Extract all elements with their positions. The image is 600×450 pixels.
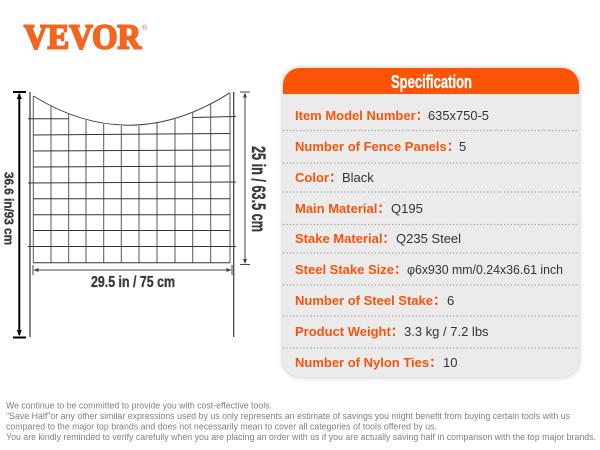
fence diagram	[2, 92, 268, 338]
row: product weight	[295, 324, 489, 339]
row: item model number: Item Model Number：	[295, 108, 429, 123]
row: stake material: Stake Material：	[295, 231, 395, 246]
footer disclaimer: compared to the major top brands and does not necessarily mean to cover all categories of tools offered by us.	[6, 422, 437, 432]
row: steel stake size	[295, 262, 563, 277]
height arrow 36.6 in: 36.6 in/93 cm	[2, 172, 16, 245]
row: number of nylon ties: 10	[443, 355, 457, 370]
row: steel stake size: Steel Stake Size：	[295, 262, 407, 277]
footer disclaimer: You are kindly reminded to verify carefully when you are placing an order with us if you are actually saving half in comparison with the top major brands.	[6, 432, 596, 442]
row: number of steel stake: Number of Steel Stake：	[295, 293, 446, 308]
footer disclaimer: We continue to be committed to provide you with cost-effective tools.	[6, 400, 272, 410]
width arrow 29.5 in	[33, 265, 232, 291]
footer disclaimer: "Save Half"or any other similar expressions used by us only represents an estimate of savings you might benefit from buying certain tools with us	[6, 411, 570, 421]
row: number of steel stake: 6	[447, 293, 454, 308]
row: product weight: 3.3 kg / 7.2 lbs	[404, 324, 489, 339]
row: number of fence panels: 5	[459, 139, 466, 154]
row: color: Black	[342, 170, 374, 185]
row: stake material	[295, 231, 461, 246]
specification panel	[282, 67, 580, 378]
row: product weight: Product Weight：	[295, 324, 404, 339]
panel header: Specification	[391, 72, 472, 92]
row: number of fence panels: Number of Fence Panels：	[295, 139, 460, 154]
row: number of nylon ties: Number of Nylon Ties：	[295, 355, 442, 370]
height arrow 36.6 in	[2, 92, 26, 338]
row: main material: Q195	[391, 201, 423, 216]
row: steel stake size: φ6x930 mm/0.24x36.61 inch	[407, 262, 563, 277]
row: item model number	[295, 108, 489, 123]
height arrow 25 in: 25 in / 63.5 cm	[247, 146, 268, 232]
row: stake material: Q235 Steel	[396, 231, 461, 246]
VEVOR logo: ®	[142, 24, 148, 32]
panel body	[283, 68, 579, 377]
fence stakes	[30, 92, 234, 337]
fence mesh	[28, 93, 236, 263]
row: item model number: 635x750-5	[428, 108, 489, 123]
row: color	[295, 170, 374, 185]
row: color: Color：	[295, 170, 342, 185]
width arrow 29.5 in: 29.5 in / 75 cm	[91, 274, 175, 291]
VEVOR logo: VEVOR	[24, 18, 142, 56]
footer disclaimer	[6, 400, 596, 442]
panel shadow	[282, 67, 580, 378]
row: main material: Main Material：	[295, 201, 390, 216]
height arrow 25 in	[240, 92, 268, 264]
panel header	[283, 68, 579, 94]
